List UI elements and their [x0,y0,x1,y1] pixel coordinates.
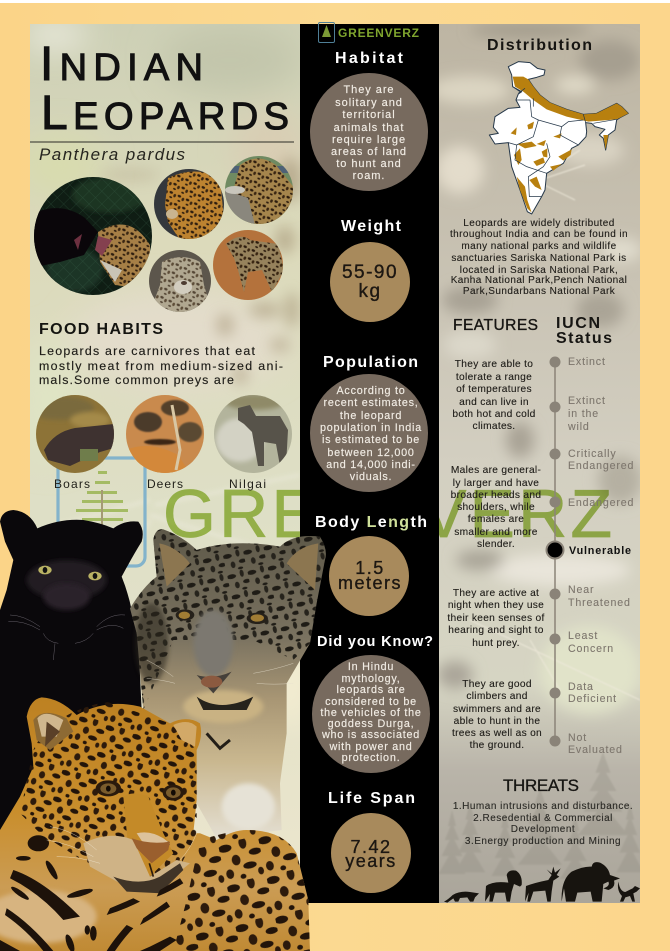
distribution text: sanctuaries Sariska National Park is [451,253,627,264]
feature: climbers and swimmers: swimmers and are [453,704,541,715]
icon: ibex [485,870,522,902]
feature: nocturnal: their keen senses of [447,613,545,624]
did you know text: goddess Durga, [328,718,414,730]
distribution text: located in Sariska National Park, [460,265,618,276]
icons: animal silhouettes [444,862,640,903]
threats list: 3.Energy production and Mining [465,836,621,847]
feature: male and female size: broader heads and [451,490,541,501]
habitat text: territorial [342,109,396,121]
status labels: Least [568,630,598,642]
habitat text: require large [332,134,406,146]
subtitle: scientific name: Panthera pardus [39,145,186,164]
animal: jaguar [0,697,310,951]
status labels: Near [568,584,594,596]
prey labels: Boars [54,477,90,491]
heading: weight: Weight [341,218,402,235]
card: habitat [310,50,428,191]
habitat text: roam. [353,170,385,182]
map: India leopard range [489,62,628,214]
population text: between 12,000 [327,447,415,459]
status labels: Threatened [568,597,631,609]
feature: climbers and swimmers: able to hunt in the [454,716,540,727]
heading: IUCN status: Status [556,330,612,347]
photo: snow leopard [149,250,212,312]
status labels: Evaluated [568,744,623,756]
status labels: wild [567,421,590,433]
status labels: Vulnerable [569,545,632,557]
forest silhouettes [438,752,644,879]
heading: population: Population [323,354,418,371]
panel: left background [30,24,300,866]
life span value [345,837,397,871]
feature: temperature tolerance: and can live in [459,397,529,408]
habitat text [331,84,407,182]
feature: male and female size: smaller and more [454,527,538,538]
section: food habits [39,321,284,387]
feature: male and female size [451,465,541,550]
body length value [338,558,402,593]
feature: climbers and swimmers: They are good [462,679,532,690]
status labels: Deficient [568,693,617,705]
population text: population in India [320,422,422,434]
did you know text: who is associated [321,729,420,741]
section: threats [453,776,633,847]
feature: nocturnal: hunt prey. [472,638,520,649]
status labels: Critically [568,448,617,460]
photo: leopard face [154,169,226,240]
brand logo: GREENVERZ [338,26,419,40]
heading: threats: THREATS [503,776,579,795]
body length value: 1.5 [355,558,385,578]
population text: According to [336,385,406,397]
habitat text: solitary and [335,97,403,109]
icon: leopard [444,892,479,903]
heading: habitat: Habitat [335,50,404,67]
distribution text: many national parks and wildlife [461,241,617,252]
did you know text: considered to be [325,696,417,708]
feature: temperature tolerance [452,359,536,432]
heading: did you know: Did you Know? [317,634,433,650]
did you know text: protection. [342,752,400,764]
did you know text: the vehicles of the [320,707,422,719]
title [40,38,289,140]
panel: right background [430,22,644,903]
habitat text: to hunt and [336,158,402,170]
feature: nocturnal: night when they use [448,600,544,611]
prey labels: Deers [147,477,183,491]
watermark: logo frame [58,458,145,566]
heading: IUCN status [556,315,612,347]
did you know text [320,661,422,764]
status labels: Extinct [568,395,606,407]
title: LEOPARDS [41,87,289,140]
feature: temperature tolerance: both hot and cold [452,409,536,420]
population text: recent estimates, [324,397,418,409]
distribution text: Leopards are widely distributed [463,218,615,229]
threats list [453,801,633,847]
prey photos [26,394,292,473]
feature: male and female size: females are [468,514,524,525]
heading: body length: Body Length [315,514,427,531]
photo: deer [126,395,204,473]
habitat text: areas of land [331,146,407,158]
card: did you know [312,634,433,773]
photo group: leopards [30,156,296,312]
icon: monkey [618,882,640,902]
title: INDIAN [40,38,203,91]
food habits paragraph: Leopards are carnivores that eat [39,344,256,358]
icon: deer [525,867,561,902]
prey labels: Nilgai [229,477,266,491]
marker: vulnerable [546,542,564,558]
did you know text: mythology, [342,673,400,685]
distribution text: Park,Sundarbans National Park [463,286,616,297]
icon: elephant [562,862,620,902]
feature: male and female size: shoulders, while [457,502,535,513]
feature: temperature tolerance: of temperatures [456,384,532,395]
food habits paragraph: mostly meat from medium-sized ani- [39,359,284,373]
status labels: Endangered [568,497,634,509]
feature: climbers and swimmers: trees as well as on [452,728,542,739]
feature: climbers and swimmers: climbers and [466,691,528,702]
population text [320,385,422,483]
prey labels [54,477,266,491]
feature: temperature tolerance: climates. [473,421,515,432]
heading: features: FEATURES [453,317,538,334]
population text: the leopard [340,410,402,422]
section: IUCN status timeline [546,315,634,756]
status labels: Endangered [568,460,634,472]
feature: male and female size: Males are general- [451,465,541,476]
distribution text: Kanha National Park,Pench National [451,275,627,286]
feature: male and female size: ly larger and have [453,478,539,489]
population text: and 14,000 indi- [326,459,416,471]
distribution text: throughout India and can be found in [450,229,628,240]
life span value: 7.42 [350,837,392,857]
weight value [342,262,398,302]
photo: leopard on orange ground [213,230,284,300]
feature: nocturnal [447,588,545,649]
section: features [447,317,545,751]
status labels [567,356,634,756]
title rule [30,141,294,143]
photo: nilgai [214,394,292,473]
did you know text: with power and [328,741,413,753]
feature: male and female size: slender. [477,539,515,550]
feature: climbers and swimmers: the ground. [470,740,524,751]
jaguar head spots [20,702,197,880]
brand logo [318,22,419,42]
photo: black panther and leopard [30,177,152,295]
leopard cutouts [0,510,326,951]
did you know text: In Hindu [348,661,394,673]
feature: nocturnal: They are active at [453,588,539,599]
status labels: in the [568,408,599,420]
did you know text: leopards are [336,684,406,696]
feature: temperature tolerance: They are able to [455,359,533,370]
threats list: 2.Resedential & Commercial [473,813,613,824]
status labels: Not [568,732,587,744]
distribution text [450,218,628,297]
heading: life span: Life Span [328,790,415,807]
body length value: meters [338,573,402,593]
habitat text: animals that [334,122,404,134]
feature: nocturnal: hearing and sight to [448,625,544,636]
heading: IUCN status: IUCN [556,315,600,332]
life span value: years [345,851,397,871]
threats list: Development [511,824,575,835]
card: weight [330,218,410,322]
population text: is estimated to be [322,434,420,446]
panel: black info column [300,24,439,903]
animal: black panther [0,510,143,850]
photo: boar [36,395,114,473]
watermark: GREENVERZ: GREENVERZ [163,476,612,552]
heading: distribution: Distribution [487,37,592,54]
population text: viduals. [350,471,392,483]
heading: food habits: FOOD HABITS [39,321,163,338]
card: body length [315,514,427,616]
weight value: 55-90 [342,262,398,283]
section: distribution [450,37,628,297]
threats list: 1.Human intrusions and disturbance. [453,801,633,812]
status labels: Data [568,681,594,693]
card: population [310,354,428,492]
animal: snow leopard [130,529,326,838]
food habits paragraph [39,344,284,387]
status labels: Extinct [568,356,606,368]
jaguar shoulder spots [173,830,310,951]
habitat text: They are [343,84,395,96]
feature: climbers and swimmers [452,679,542,751]
photo: leopard seated [225,156,296,225]
weight value: kg [358,281,382,302]
status labels: Concern [568,643,614,655]
feature: temperature tolerance: tolerate a range [456,372,532,383]
food habits paragraph: mals.Some common preys are [39,373,235,387]
card: life span [328,790,415,893]
